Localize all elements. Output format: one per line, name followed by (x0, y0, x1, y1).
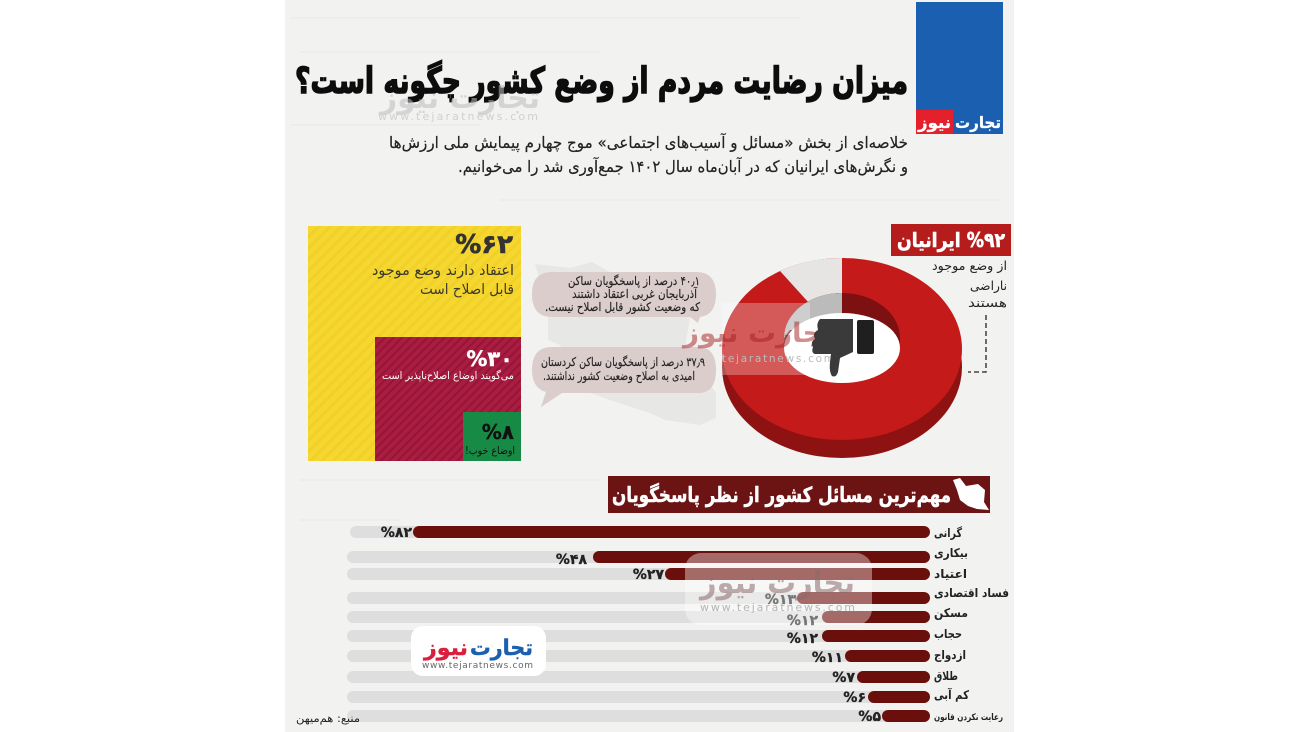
logo card (411, 626, 546, 676)
percentage labels: %۱۱ (812, 650, 843, 666)
donut caption: از وضع موجود (932, 258, 1007, 274)
donut caption: ناراضی (970, 278, 1007, 294)
percentage labels: %۶ (843, 690, 866, 706)
section heading: مهم‌ترین مسائل کشور از نظر پاسخگویان (612, 482, 951, 507)
bar values (413, 526, 930, 722)
percentage labels: %۱۲ (787, 631, 818, 647)
speech bubble: west azerbaijan: ۴۰٫۱ درصد از پاسخگویان ساکن (568, 274, 700, 289)
green square 8 percent: اوضاع خوب! (465, 445, 515, 457)
yellow square 62 percent: %۶۲ (455, 230, 513, 260)
dashed leader line (968, 315, 986, 372)
watermark: centre (681, 303, 834, 375)
row labels: ازدواج (934, 648, 966, 663)
map silhouette behind bubbles (535, 262, 716, 425)
logo card: نیوز (423, 636, 468, 661)
donut chart 92 percent (722, 258, 962, 458)
percentage labels: %۵ (858, 709, 881, 725)
row labels: اعتیاد (934, 567, 967, 581)
percentage labels: %۲۷ (633, 567, 664, 583)
logo card: تجارت (470, 636, 533, 661)
row labels: حجاب (934, 627, 962, 641)
bar chart: main problems (347, 525, 1009, 725)
watermark: centre: تجارت نیوز (681, 318, 833, 349)
red square 30 percent (375, 337, 521, 461)
yellow square 62 percent: اعتقاد دارند وضع موجود (372, 263, 514, 279)
watermark: over bars: تجارت نیوز (698, 565, 855, 601)
donut side wall (722, 276, 962, 458)
percentage labels: %۱۲ (787, 613, 818, 629)
row labels (934, 526, 1009, 723)
icon: thumbs down (812, 319, 874, 376)
speech bubble: kurdistan: امیدی به اصلاح وضعیت کشور نداشتند. (543, 369, 695, 384)
title: میزان رضایت مردم از وضع کشور چگونه است؟ (295, 60, 908, 102)
red square 30 percent: %۳۰ (466, 347, 513, 371)
speech bubble: west azerbaijan: آذربایجان غربی اعتقاد داشتند (572, 286, 698, 302)
donut hole (784, 313, 900, 383)
brand block: blue square with logo: تجارت (955, 113, 1001, 132)
icon: Iran map (953, 478, 989, 510)
watermark: centre: tejaratnews.com (722, 353, 834, 365)
section heading (608, 476, 990, 513)
watermark: over bars (685, 553, 872, 625)
speech bubble: kurdistan: ۳۷٫۹ درصد از پاسخگویان ساکن کردستان (541, 355, 705, 370)
green square 8 percent: %۸ (482, 420, 514, 444)
percentage labels: %۷ (832, 670, 855, 686)
row labels: رعایت نکردن قانون (934, 713, 1003, 723)
percentage labels (381, 525, 881, 725)
speech bubble: west azerbaijan: که وضعیت کشور قابل اصلاح نیست. (545, 300, 700, 315)
watermark: top: www.tejaratnews.com (378, 110, 538, 123)
donut hole wall (784, 293, 900, 348)
nested squares chart (308, 226, 521, 461)
bar tracks (347, 526, 930, 722)
intro paragraph: و نگرش‌های ایرانیان که در آبان‌ماه سال ۱۴۰۲ جمع‌آوری شد را می‌خوانیم. (458, 157, 908, 177)
row labels: مسکن (934, 606, 968, 620)
row labels: فساد اقتصادی (934, 586, 1009, 600)
donut caption: هستند (968, 295, 1007, 310)
brand block: blue square with logo: نیوز (917, 113, 951, 132)
speech bubble: west azerbaijan (532, 272, 716, 323)
row labels: گرانی (934, 526, 962, 540)
green square 8 percent (463, 412, 521, 461)
source note: منبع: هم‌میهن (296, 712, 360, 725)
logo card: www.tejaratnews.com (422, 661, 533, 671)
donut caption (932, 258, 1007, 310)
percentage labels: %۸۲ (381, 525, 412, 541)
speech bubble: kurdistan (532, 347, 716, 407)
intro paragraph (389, 133, 908, 177)
row labels: بیکاری (934, 546, 968, 560)
red square 30 percent: می‌گویند اوضاع اصلاح‌ناپذیر است (382, 369, 514, 382)
percentage labels: %۴۸ (556, 552, 587, 568)
grey slice (780, 258, 842, 303)
brand block: blue square with logo (916, 2, 1003, 134)
row labels: طلاق (934, 669, 958, 683)
watermark: top: تجارت نیوز (378, 81, 540, 116)
yellow square 62 percent (308, 226, 521, 461)
badge: 92 percent of Iranians: %۹۲ ایرانیان (897, 228, 1005, 252)
row labels: کم آبی (934, 687, 969, 702)
paper background panel (285, 0, 1014, 732)
percentage labels: %۱۳ (765, 592, 796, 608)
yellow square 62 percent: قابل اصلاح است (420, 282, 514, 298)
intro paragraph: خلاصه‌ای از بخش «مسائل و آسیب‌های اجتماعی» موج چهارم پیمایش ملی ارزش‌ها (389, 133, 908, 153)
donut top face (722, 258, 962, 440)
watermark: over bars: www.tejaratnews.com (700, 601, 855, 614)
